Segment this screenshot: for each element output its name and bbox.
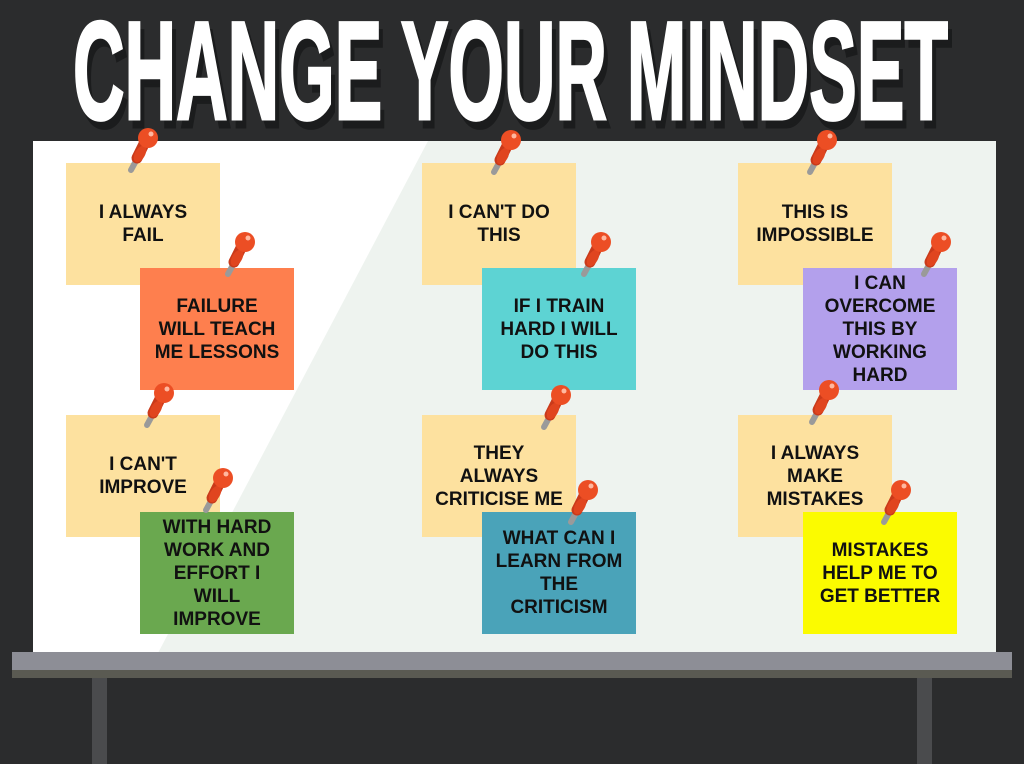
pin 4 [206, 468, 233, 510]
pin 3 [147, 383, 174, 425]
note: if I train hard: HARD I WILL [500, 318, 618, 340]
note: I always make mistakes: I ALWAYS [771, 442, 859, 464]
pin 6 [584, 232, 611, 274]
pin 10 [924, 232, 951, 274]
note: I can't improve: I CAN'T [109, 454, 177, 475]
note: what can I learn: LEARN FROM [496, 551, 622, 572]
note: mistakes help me: HELP ME TO [822, 562, 938, 584]
note: failure will teach me lessons: FAILURE [176, 296, 258, 316]
note: I can overcome: HARD [853, 364, 907, 386]
note: what can I learn: CRITICISM [510, 597, 608, 618]
note: with hard work and effort: EFFORT I [174, 562, 260, 584]
note: I can overcome: I CAN [854, 272, 906, 294]
note: failure will teach me lessons [140, 268, 294, 390]
note: mistakes help me [803, 512, 957, 634]
note: if I train hard: DO THIS [520, 342, 598, 362]
note: failure will teach me lessons: WILL TEACH [159, 318, 275, 340]
note: mistakes help me: MISTAKES [832, 540, 928, 560]
shelf [12, 652, 1012, 678]
pin 7 [544, 385, 571, 427]
pin 12 [884, 480, 911, 522]
note: I always make mistakes: MAKE [787, 466, 843, 486]
note: I can overcome [803, 268, 957, 390]
note: they always criticise me: CRITICISE ME [435, 488, 563, 510]
whiteboard [33, 141, 996, 652]
note: I can't do this [422, 163, 576, 285]
note: I can't improve [66, 415, 220, 537]
pin 1 [131, 128, 158, 170]
note: I can't do this: I CAN'T DO [448, 202, 550, 223]
note: I always make mistakes: MISTAKES [767, 488, 863, 510]
note: I always fail: FAIL [122, 225, 164, 246]
note: they always criticise me [422, 415, 576, 537]
note: if I train hard [482, 268, 636, 390]
note: I can't do this: THIS [477, 225, 521, 246]
note: I can overcome: THIS BY [843, 318, 917, 340]
note: I can't improve: IMPROVE [99, 477, 187, 498]
note: with hard work and effort: WORK AND [164, 540, 270, 560]
pin 8 [571, 480, 598, 522]
note: mistakes help me: GET BETTER [820, 586, 940, 606]
note: with hard work and effort: WILL [194, 586, 240, 606]
note: I always fail: I ALWAYS [99, 202, 187, 223]
note: I can overcome: WORKING [833, 342, 927, 362]
note: failure will teach me lessons: ME LESSONS [155, 342, 279, 362]
note: this is impossible [738, 163, 892, 285]
note: what can I learn: WHAT CAN I [503, 528, 615, 549]
note: this is impossible: IMPOSSIBLE [756, 225, 874, 246]
note: with hard work and effort [140, 512, 294, 634]
note: I can overcome: OVERCOME [825, 296, 935, 316]
pin 2 [228, 232, 255, 274]
note: with hard work and effort: WITH HARD [163, 516, 271, 538]
note: I always fail [66, 163, 220, 285]
note: they always criticise me: ALWAYS [460, 466, 538, 486]
note: what can I learn [482, 512, 636, 634]
note: with hard work and effort: IMPROVE [173, 608, 261, 630]
note: I always make mistakes [738, 415, 892, 537]
pin 5 [494, 130, 521, 172]
note: this is impossible: THIS IS [782, 202, 848, 223]
pin 11 [812, 380, 839, 422]
note: they always criticise me: THEY [474, 442, 524, 464]
note: what can I learn: THE [540, 574, 578, 595]
pin 9 [810, 130, 837, 172]
note: if I train hard: IF I TRAIN [514, 296, 604, 316]
